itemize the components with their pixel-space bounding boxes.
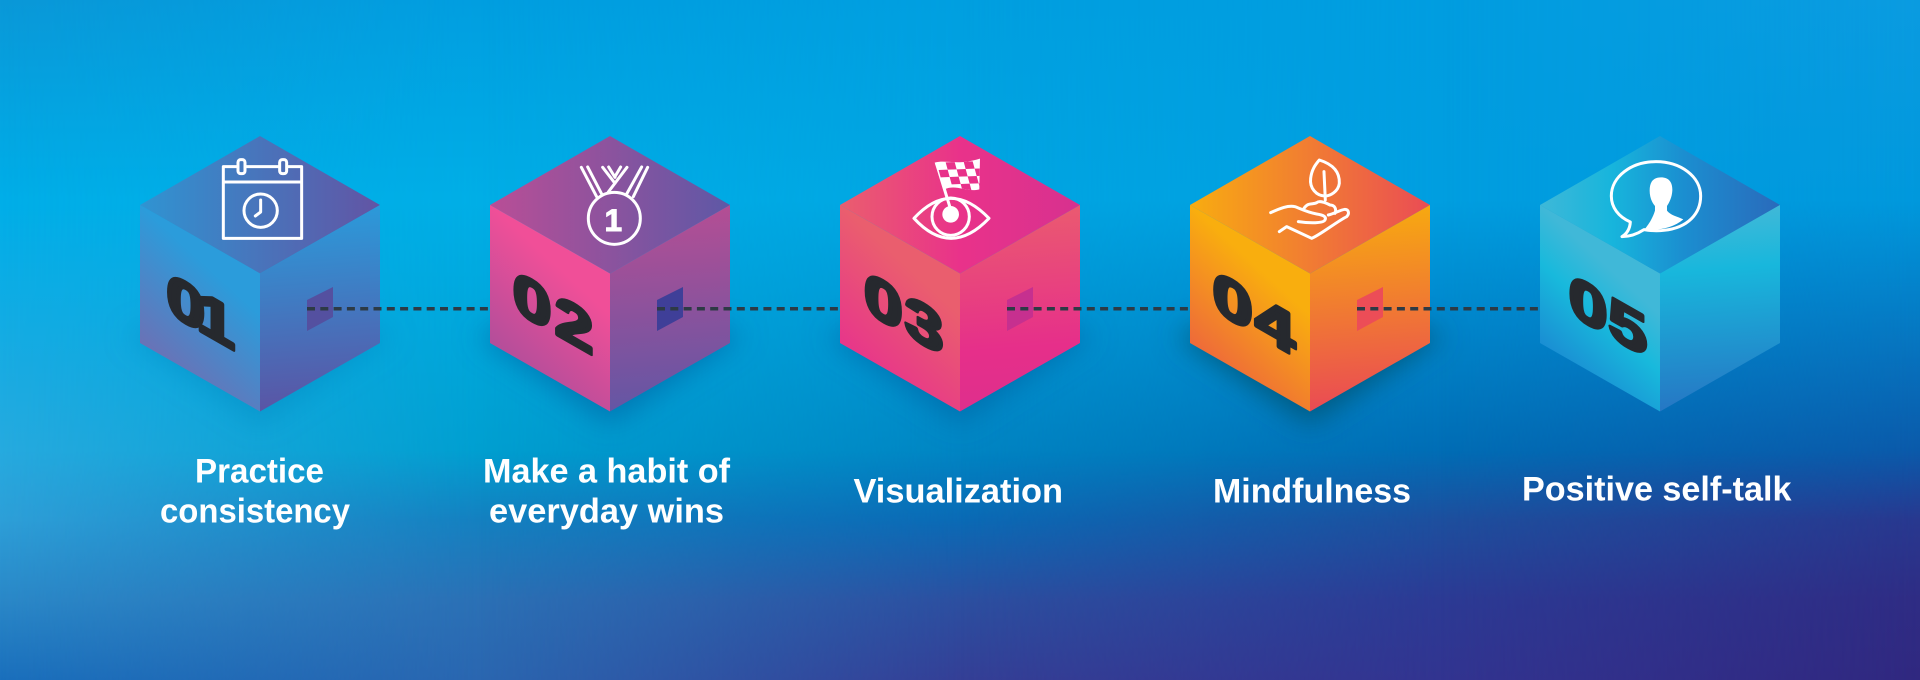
number 02: 02 — [513, 257, 594, 368]
cube 05 — [1540, 136, 1780, 412]
icon: medal — [581, 167, 648, 244]
icon: medal: 1 — [605, 202, 622, 238]
cube 01 — [140, 136, 380, 412]
number 01: 01 — [166, 259, 235, 363]
label: Practice consistency: consistency — [160, 493, 350, 531]
label: Make a habit of everyday wins: everyday wins — [489, 493, 724, 531]
dotted connector lines — [307, 307, 1540, 310]
number 03: 03 — [864, 258, 944, 368]
label: Practice consistency — [160, 453, 350, 531]
icon: eye with checkered flag — [914, 159, 990, 238]
label: Positive self-talk: Positive self-talk — [1522, 471, 1792, 509]
cube 04 — [1190, 136, 1430, 412]
cube shadows — [125, 300, 1445, 424]
icon: calendar with clock — [223, 160, 302, 238]
label: Mindfulness: Mindfulness — [1213, 473, 1411, 511]
cube 03 — [840, 136, 1080, 412]
label: Visualization: Visualization — [854, 473, 1063, 511]
icon: speech bubble with person — [1611, 162, 1701, 237]
label: Make a habit of everyday wins — [483, 453, 731, 531]
number 04: 04 — [1212, 258, 1295, 370]
label: Practice consistency: Practice — [195, 453, 324, 491]
cube 02 — [490, 136, 730, 412]
label: Make a habit of everyday wins: Make a habit of — [483, 453, 731, 491]
icon: hand holding seedling — [1271, 160, 1348, 238]
number 05: 05 — [1569, 261, 1647, 370]
